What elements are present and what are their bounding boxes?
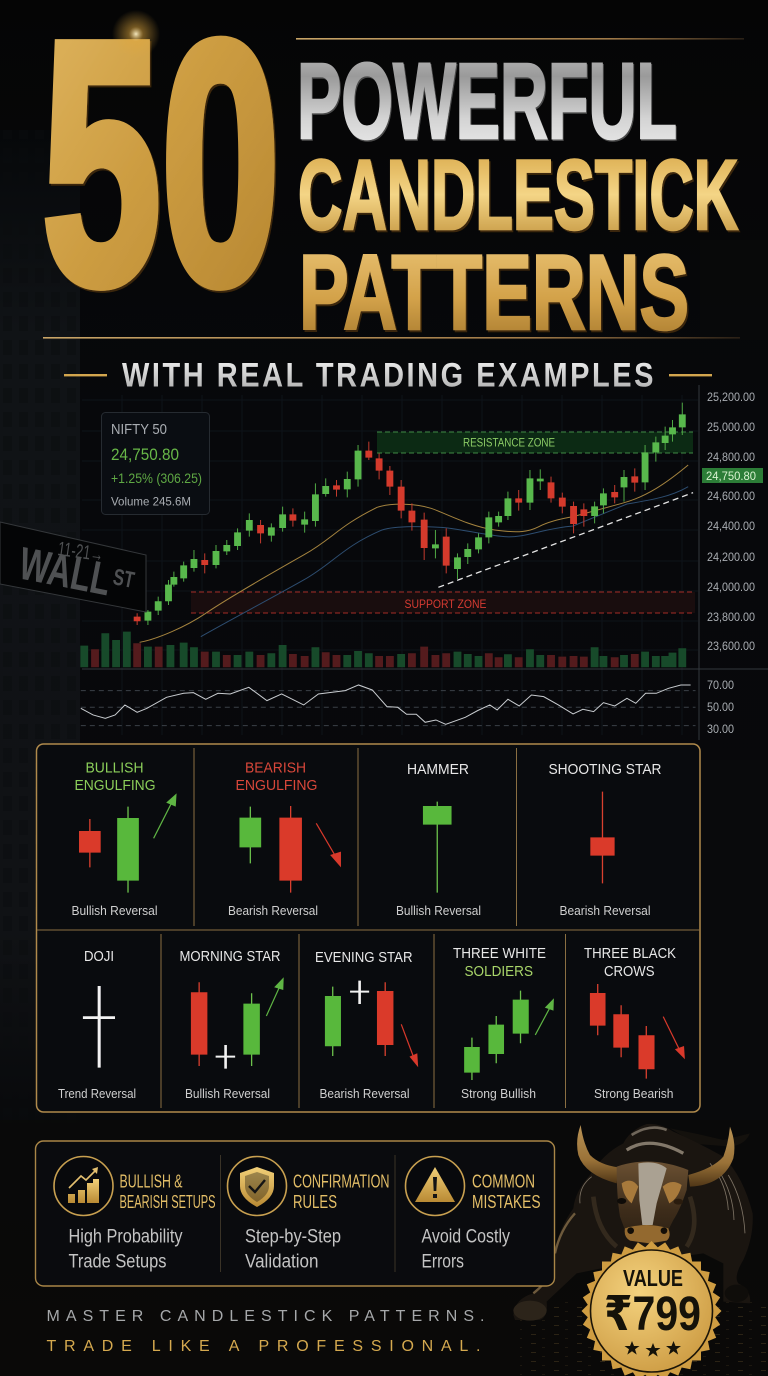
feature: confirmation: CONFIRMATION (293, 1170, 390, 1192)
chart grid (82, 395, 698, 735)
feature: setups (54, 1156, 216, 1272)
panel dividers (37, 748, 700, 1108)
pattern: morning star labels: MORNING STAR (180, 948, 281, 965)
pattern: hammer labels: HAMMER (407, 761, 469, 778)
price axis labels: 25,000.00 (707, 420, 755, 434)
resistance zone (377, 432, 693, 453)
pattern: morning star labels (180, 948, 281, 1101)
pattern: hammer labels (396, 761, 481, 918)
NIFTY 50 info panel (102, 412, 210, 514)
feature: confirmation: Validation (245, 1252, 318, 1272)
feature: setups: Trade Setups (68, 1252, 166, 1272)
pattern: three white soldiers labels (453, 945, 546, 1101)
red candle bodies (134, 451, 638, 621)
current price tag: 24,750.80 (706, 469, 756, 483)
icon: rising bar chart (54, 1156, 113, 1216)
moving average blue (201, 487, 688, 637)
pattern: doji labels (58, 948, 136, 1101)
feature: setups: BEARISH SETUPS (120, 1191, 216, 1212)
chart: price, volume and RSI (0, 385, 768, 740)
white doji crosses (83, 981, 369, 1069)
pattern: evening star labels: EVENING STAR (315, 949, 413, 966)
price axis labels (707, 390, 755, 736)
pattern: three white soldiers labels: SOLDIERS (464, 963, 533, 980)
price axis labels: 30.00 (707, 722, 734, 736)
decorative glow on 5 (112, 10, 160, 58)
panel: candlestick patterns (36, 744, 700, 1112)
feature: mistakes: COMMON (472, 1170, 535, 1192)
support zone (191, 592, 695, 613)
pattern: bearish engulfing labels: BEARISH (245, 760, 306, 776)
trend line (438, 493, 693, 587)
price axis labels: 24,200.00 (707, 550, 755, 564)
title: rule bottom (43, 337, 740, 339)
price badge: VALUE (623, 1265, 683, 1291)
green candle bodies (144, 414, 686, 621)
price badge: ₹799 (604, 1288, 701, 1341)
pattern: three black crows labels: THREE BLACK (584, 945, 676, 962)
feature: mistakes: Avoid Costly (422, 1226, 510, 1248)
pattern candles, drawn in scaled coordinates (79, 792, 685, 1080)
price axis labels: 24,400.00 (707, 519, 755, 533)
price axis labels: 70.00 (707, 678, 734, 692)
badge starburst (581, 1241, 722, 1376)
pattern: bullish engulfing labels (72, 760, 158, 918)
candles and indicators, drawn in scaled coordinates (80, 403, 696, 726)
RSI line (81, 685, 691, 724)
pattern: doji labels: Trend Reversal (58, 1086, 136, 1101)
tagline: TRADE LIKE A PROFESSIONAL. (46, 1338, 481, 1355)
feature: mistakes: MISTAKES (472, 1191, 540, 1212)
feature: confirmation (228, 1156, 390, 1272)
pattern: three black crows labels: Strong Bearish (594, 1086, 674, 1101)
pattern: bullish engulfing labels: ENGULFING (74, 777, 156, 794)
icon: shield check (228, 1156, 286, 1216)
pattern: evening star labels: Bearish Reversal (320, 1086, 410, 1101)
feature: setups: BULLISH & (120, 1170, 183, 1192)
subtitle: WITH REAL TRADING EXAMPLES (122, 356, 656, 394)
resistance zone: RESISTANCE ZONE (463, 438, 555, 450)
volume bars (80, 632, 686, 667)
price axis labels: 23,800.00 (707, 610, 755, 624)
green wicks (128, 802, 521, 1080)
red arrows (316, 823, 685, 1067)
green arrows (154, 793, 554, 1035)
pattern: doji labels: DOJI (84, 948, 114, 965)
red bodies (79, 818, 655, 1069)
feature: mistakes: Errors (422, 1252, 464, 1272)
red wicks (137, 442, 635, 625)
Wall St sign: ST (111, 563, 137, 593)
icon: warning triangle (406, 1156, 464, 1216)
pattern: bullish engulfing labels: BULLISH (86, 760, 144, 776)
pattern: three white soldiers labels: Strong Bullish (461, 1086, 536, 1101)
price axis labels: 24,600.00 (707, 489, 755, 503)
feature: mistakes (406, 1156, 540, 1272)
pattern: three white soldiers labels: THREE WHITE (453, 945, 546, 962)
NIFTY 50 info panel: +1.25% (306.25) (111, 470, 202, 486)
Wall St sign: 11-21→ (56, 538, 105, 566)
pattern: morning star labels: Bullish Reversal (185, 1086, 270, 1101)
pattern: three black crows labels (584, 945, 676, 1101)
moving average orange (140, 465, 688, 642)
pattern: shooting star labels (548, 761, 662, 918)
green wicks (148, 403, 682, 625)
pattern: evening star labels (315, 949, 413, 1101)
pattern: bullish engulfing labels: Bullish Reversal (72, 903, 158, 918)
volume bars red (91, 643, 639, 667)
pattern: shooting star labels: SHOOTING STAR (548, 761, 662, 778)
panel: features (36, 1141, 554, 1286)
NIFTY 50 info panel: NIFTY 50 (111, 421, 167, 438)
pattern: three black crows labels: CROWS (604, 963, 654, 980)
price axis labels: 24,000.00 (707, 580, 755, 594)
title: rule top (296, 38, 744, 40)
support zone: SUPPORT ZONE (404, 599, 487, 611)
bull illustration (513, 1124, 753, 1321)
feature: setups: High Probability (68, 1226, 183, 1248)
price axis labels: 25,200.00 (707, 390, 755, 404)
pattern: bearish engulfing labels (228, 760, 318, 918)
Wall St sign: WALL (15, 537, 115, 605)
pattern: shooting star labels: Bearish Reversal (560, 903, 651, 918)
price badge (581, 1241, 722, 1376)
price axis labels: 23,600.00 (707, 639, 755, 653)
tagline (46, 1308, 485, 1355)
NIFTY 50 info panel: Volume 245.6M (111, 494, 191, 508)
RSI guides (81, 691, 696, 726)
green bodies (117, 806, 529, 1073)
feature: confirmation: RULES (293, 1191, 337, 1212)
pattern: bearish engulfing labels: ENGULFING (236, 777, 318, 794)
NIFTY 50 info panel: 24,750.80 (111, 445, 179, 464)
price axis labels: 24,800.00 (707, 450, 755, 464)
pattern: bearish engulfing labels: Bearish Reversal (228, 903, 318, 918)
tagline: MASTER CANDLESTICK PATTERNS. (46, 1308, 485, 1325)
pattern: hammer labels: Bullish Reversal (396, 903, 481, 918)
red wicks (90, 792, 646, 1079)
feature: confirmation: Step-by-Step (245, 1226, 341, 1248)
price axis labels: 50.00 (707, 700, 734, 714)
